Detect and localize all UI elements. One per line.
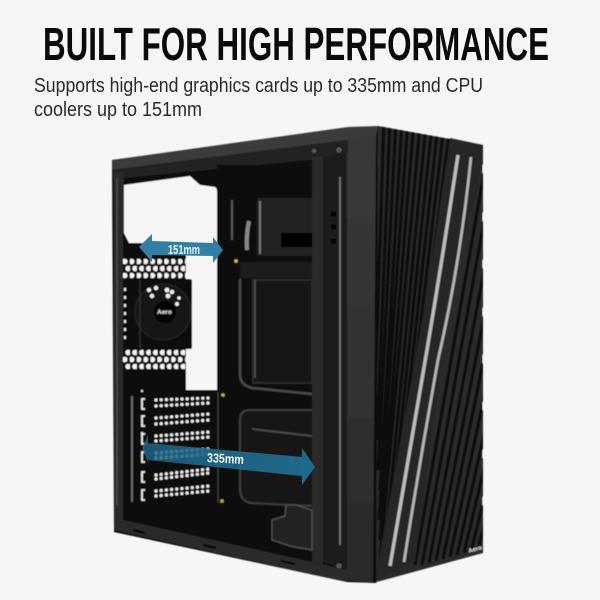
logo: Aero (468, 545, 483, 555)
expansion slots (132, 390, 209, 506)
power supply and backplate opening (124, 176, 217, 390)
bottom frame bar (114, 520, 347, 582)
front pillar (347, 127, 376, 583)
side panel fins (376, 126, 484, 565)
cooling fan (123, 279, 192, 349)
top frame band (112, 140, 348, 180)
side panel light stripe 1 (390, 155, 458, 566)
side panel (375, 125, 484, 583)
side panel light stripe 2 (404, 157, 471, 562)
arrow: 335mm graphics card clearance (142, 435, 315, 485)
centre pillar (312, 156, 323, 564)
subtitle text: Supports high-end graphics cards up to 335mm and CPU (34, 75, 483, 97)
right edge notches (482, 165, 486, 505)
top bar (112, 126, 378, 170)
hard drive cage (272, 505, 312, 550)
right inner rail (323, 143, 347, 570)
arrow: 335mm graphics card clearance: 335mm (207, 450, 244, 467)
arrow: 151mm cooler clearance (139, 234, 223, 263)
PC case (111, 125, 484, 584)
subtitle text (34, 75, 483, 121)
middle tray wall (217, 165, 312, 565)
cooling fan: Aero (157, 309, 172, 316)
left pillar (114, 172, 123, 530)
arrow: 151mm cooler clearance: 151mm (168, 242, 200, 257)
subtitle text: coolers up to 151mm (34, 99, 202, 121)
side panel stripe band (375, 138, 483, 580)
mesh plate (123, 243, 186, 369)
inner rail light strip (339, 177, 341, 545)
front frame (112, 126, 378, 583)
screws (117, 146, 342, 570)
rail holes (331, 214, 336, 241)
